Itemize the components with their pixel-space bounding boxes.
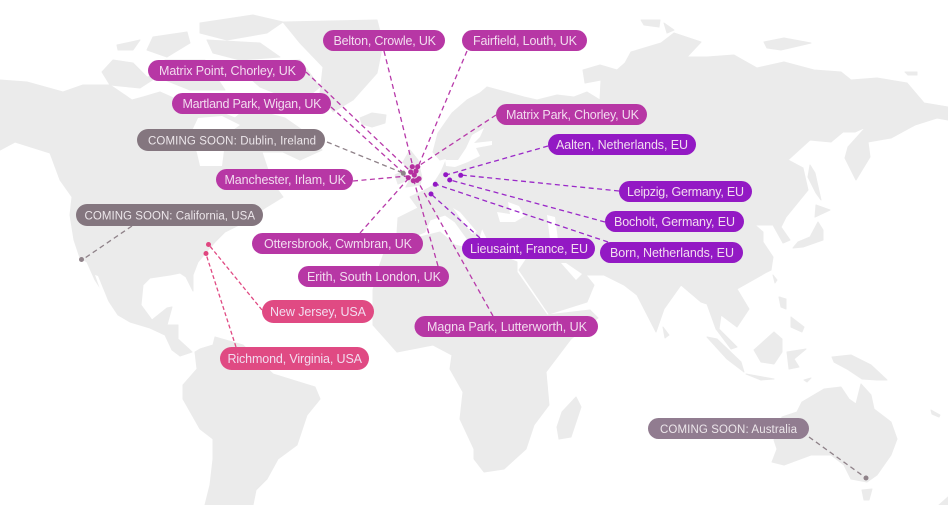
Severnaya Zemlya xyxy=(764,38,811,50)
Timor xyxy=(804,378,811,382)
Honshu xyxy=(793,222,823,248)
Greenland xyxy=(283,20,383,112)
label: Magna Park, Lutterworth, UK: Magna Park, Lutterworth, UK xyxy=(427,320,588,334)
Hainan xyxy=(780,297,785,300)
Svalbard xyxy=(641,20,660,27)
Hokkaido xyxy=(815,205,830,217)
label: COMING SOON: Dublin, Ireland xyxy=(137,129,325,151)
label: Richmond, Virginia, USA: Richmond, Virginia, USA xyxy=(228,352,363,366)
Black Sea xyxy=(497,202,525,222)
label: Martland Park, Wigan, UK xyxy=(172,93,331,114)
label: Richmond, Virginia, USA xyxy=(220,347,369,370)
Persian Gulf xyxy=(561,263,582,280)
label: Belton, Crowle, UK xyxy=(323,30,445,51)
Sakhalin xyxy=(808,165,821,200)
Eurasia xyxy=(397,33,948,349)
label: Belton, Crowle, UK: Belton, Crowle, UK xyxy=(334,34,437,48)
Sri Lanka xyxy=(663,327,669,338)
North America xyxy=(0,80,322,356)
label: New Jersey, USA: New Jersey, USA xyxy=(270,305,367,319)
label: Erith, South London, UK xyxy=(298,266,449,287)
Great Britain xyxy=(403,150,422,187)
label: Erith, South London, UK: Erith, South London, UK xyxy=(307,270,442,284)
Madagascar xyxy=(557,397,581,439)
Java xyxy=(746,374,774,380)
label: Matrix Point, Chorley, UK xyxy=(148,60,306,81)
Adriatic Sea xyxy=(453,208,477,234)
label: Matrix Park, Chorley, UK xyxy=(496,104,647,125)
Arctic islands xyxy=(200,15,283,40)
label: Ottersbrook, Cwmbran, UK xyxy=(252,233,423,254)
label: Fairfield, Louth, UK: Fairfield, Louth, UK xyxy=(473,34,578,48)
label: COMING SOON: Dublin, Ireland: COMING SOON: Dublin, Ireland xyxy=(148,136,316,148)
Baltic Sea xyxy=(445,128,492,167)
label: Matrix Point, Chorley, UK: Matrix Point, Chorley, UK xyxy=(159,64,297,78)
location dots xyxy=(79,164,868,481)
label: COMING SOON: California, USA xyxy=(76,204,263,226)
label: COMING SOON: Australia xyxy=(648,418,809,439)
Sulawesi xyxy=(787,349,806,369)
label: Leipzig, Germany, EU: Leipzig, Germany, EU xyxy=(627,185,744,199)
label: Martland Park, Wigan, UK: Martland Park, Wigan, UK xyxy=(182,97,322,111)
connector lines xyxy=(82,51,866,478)
Australia xyxy=(772,384,897,482)
label: Born, Netherlands, EU: Born, Netherlands, EU xyxy=(610,246,734,260)
label: Aalten, Netherlands, EU xyxy=(548,134,696,155)
label: COMING SOON: California, USA: COMING SOON: California, USA xyxy=(84,210,255,222)
Taiwan xyxy=(773,275,777,283)
label: Born, Netherlands, EU xyxy=(600,242,743,263)
seas drawn over land xyxy=(95,105,582,306)
label: Fairfield, Louth, UK xyxy=(462,30,587,51)
Philippines xyxy=(779,297,786,309)
New Guinea xyxy=(832,355,887,380)
South America xyxy=(183,337,320,505)
label: Aalten, Netherlands, EU: Aalten, Netherlands, EU xyxy=(556,138,688,152)
label: Lieusaint, France, EU xyxy=(462,238,595,259)
label: Matrix Park, Chorley, UK: Matrix Park, Chorley, UK xyxy=(506,108,640,122)
Hudson Bay xyxy=(190,116,240,166)
Gulf of California xyxy=(95,275,109,306)
Iceland xyxy=(360,113,386,127)
White Sea xyxy=(500,105,518,124)
label: Bocholt, Germany, EU: Bocholt, Germany, EU xyxy=(614,215,735,229)
Caspian Sea xyxy=(547,215,558,240)
Tasmania xyxy=(862,489,872,500)
label: Manchester, Irlam, UK xyxy=(216,169,353,190)
Ireland xyxy=(395,170,408,184)
label: Ottersbrook, Cwmbran, UK: Ottersbrook, Cwmbran, UK xyxy=(264,237,413,251)
label: Leipzig, Germany, EU xyxy=(619,181,752,202)
Sumatra xyxy=(707,337,744,372)
Africa xyxy=(373,232,598,472)
label: Bocholt, Germany, EU xyxy=(605,211,744,232)
label: Lieusaint, France, EU: Lieusaint, France, EU xyxy=(470,242,588,256)
Borneo xyxy=(754,332,782,364)
label: New Jersey, USA xyxy=(262,300,374,323)
label: COMING SOON: Australia: COMING SOON: Australia xyxy=(660,424,798,436)
label: Manchester, Irlam, UK: Manchester, Irlam, UK xyxy=(224,173,347,187)
New Zealand xyxy=(931,410,940,417)
label: Magna Park, Lutterworth, UK xyxy=(414,316,598,337)
